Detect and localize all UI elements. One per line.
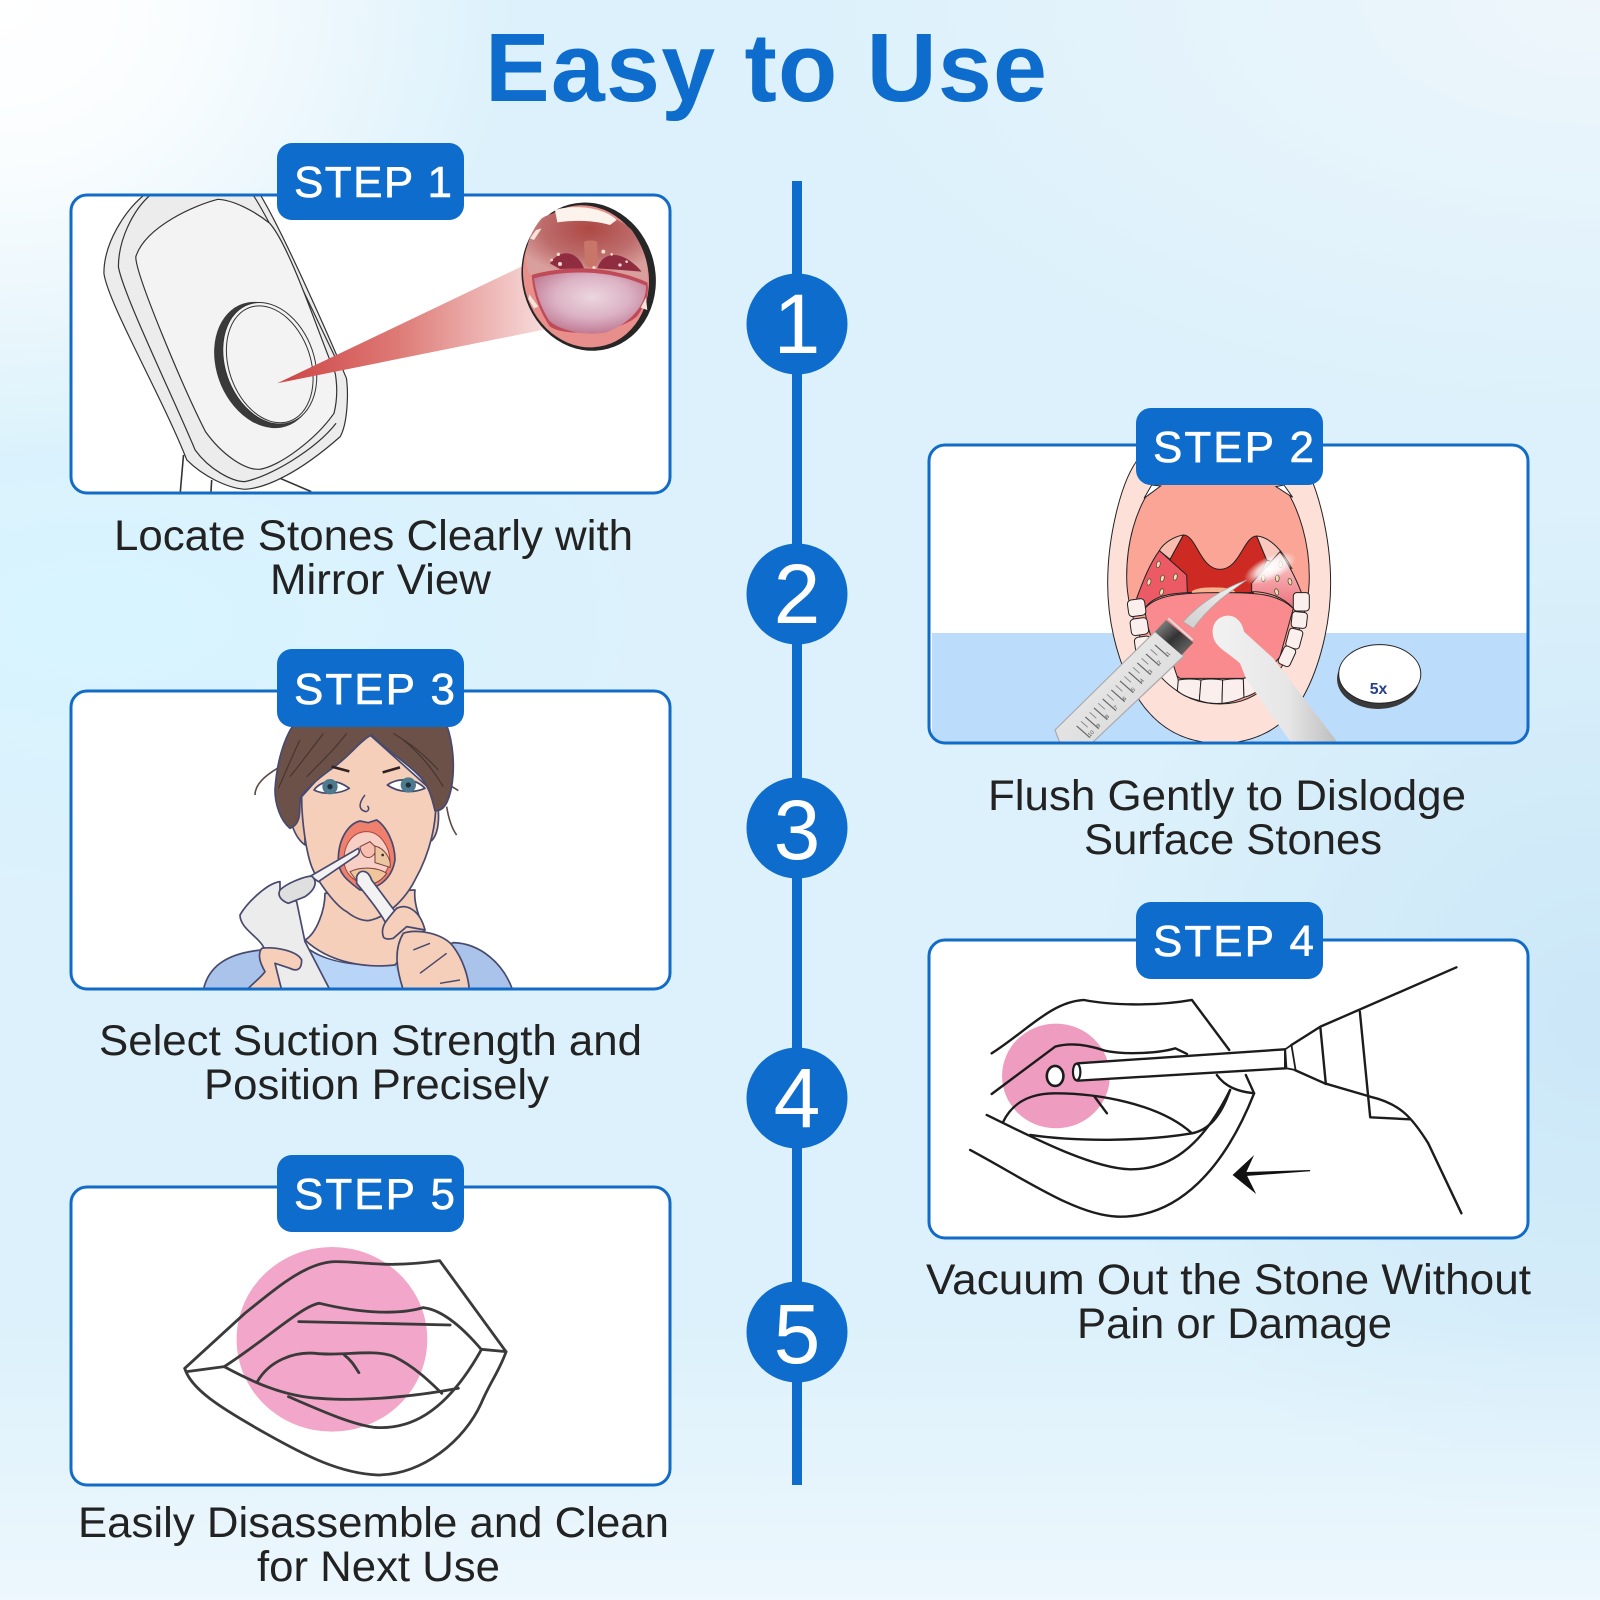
card border [71,1187,670,1485]
panel: step 3 [71,649,670,1109]
caption: step 2: Surface Stones [1084,816,1382,864]
caption: step 1: Mirror View [270,556,492,604]
left hand [247,948,302,990]
number 2 [746,544,848,644]
syringe scale numbers [1087,651,1172,738]
card [71,691,670,989]
badge: step 1: STEP 1 [294,158,452,207]
teeth [1127,593,1309,703]
caption: step 1 [114,512,633,604]
card [929,940,1528,1238]
card border [71,195,670,493]
caption: step 4: Vacuum Out the Stone Without [926,1256,1531,1304]
illustration: open lips with highlight [185,1247,506,1475]
badge: step 1 [277,143,464,220]
syringe scale numbers: 5 [1130,687,1137,693]
number 5: 5 [774,1287,820,1381]
throat [1170,535,1267,593]
red beam [277,265,545,383]
caption: step 4 [926,1256,1531,1348]
palate [526,210,648,282]
mouth [338,820,395,890]
number 2: 2 [774,547,820,641]
number 4 [746,1048,848,1148]
hair [275,725,453,828]
syringe [1055,580,1247,743]
caption: step 1: Locate Stones Clearly with [114,512,633,560]
device handle [1291,967,1461,1213]
number 3 [746,778,848,878]
nose [360,795,369,812]
illustration: open mouth, syringe flushing tonsils [932,457,1528,743]
lips [185,1261,506,1475]
mouth cavity [1127,479,1309,704]
magnified mouth mirror [521,202,656,351]
badge: step 4: STEP 4 [1153,917,1314,966]
blue floor [932,633,1528,743]
panel: step 1 [71,143,672,604]
caption: step 5: for Next Use [257,1543,500,1591]
illustration: mirror stand with magnified mouth view [104,187,672,493]
number 3: 3 [774,783,820,877]
card [929,445,1528,743]
syringe scale numbers: 9 [1096,723,1102,729]
title: Easy to Use [485,13,1047,122]
corner upper teeth [1144,485,1293,498]
number 1 [746,274,848,374]
syringe scale numbers: 7 [1113,705,1120,711]
card [71,195,670,493]
throat [550,253,642,272]
eyes [314,777,425,794]
syringe scale numbers: 10 [1087,730,1096,738]
suction tube [1073,1045,1296,1081]
spray [1244,552,1295,584]
stand legs [180,455,311,493]
panel: step 5 [71,1155,670,1591]
caption: step 3 [99,1017,642,1109]
badge: step 5: STEP 5 [294,1170,455,1219]
badge: step 4 [1136,902,1323,979]
5x mirror: 5x [1370,681,1388,698]
shirt [203,943,513,990]
card border [929,940,1528,1238]
tonsil stones [1146,561,1293,596]
small round mirror [214,302,318,428]
caption: step 4: Pain or Damage [1077,1300,1392,1348]
neck and chest [305,890,425,966]
syringe scale numbers: 1 [1165,651,1172,657]
teal hair clip behind card [264,697,282,712]
illustration: vacuuming the stone from tonsil [970,967,1461,1217]
uvula base [1192,587,1235,593]
card border [71,691,670,989]
number 4: 4 [774,1051,820,1145]
illustration: woman using suction device [203,725,513,990]
mirror face [136,199,337,469]
white stick [1213,616,1338,743]
arrow [1233,1155,1310,1194]
caption: step 5: Easily Disassemble and Clean [78,1499,669,1547]
syringe scale numbers: 6 [1122,696,1128,702]
number 5 [746,1282,848,1382]
inner stick and upper fingers [357,871,425,939]
pink highlight [237,1247,427,1432]
caption: step 3: Position Precisely [204,1061,549,1109]
caption: step 2: Flush Gently to Dislodge [988,772,1466,820]
timeline: central line with numbered circles [746,181,848,1485]
pink highlight [1002,1024,1110,1128]
tonsil stones [550,250,628,269]
left tonsil [1137,551,1187,608]
card [71,1187,670,1485]
badge: step 2: STEP 2 [1153,423,1314,472]
caption: step 2 [988,772,1466,864]
badge: step 3: STEP 3 [294,665,455,714]
card border [929,445,1528,743]
face [302,735,436,921]
ears [292,802,306,846]
badge: step 2 [1136,408,1323,485]
syringe scale numbers: 2 [1156,660,1163,666]
side tooth highlights [528,294,647,310]
syringe scale numbers: 8 [1104,714,1111,720]
panel: step 4 [926,902,1531,1348]
caption: step 5 [78,1499,669,1591]
outer lips [1108,457,1331,743]
right tonsil [1252,552,1302,608]
number 1: 1 [774,277,820,371]
syringe scale numbers: 3 [1148,669,1154,675]
stone [1047,1066,1063,1086]
lips [970,1000,1254,1217]
panel: step 2 [929,408,1528,864]
tongue [1145,593,1293,678]
badge: step 3 [277,649,464,727]
lower lip edge and tongue [532,268,648,333]
stray hair [255,768,458,835]
badge: step 5 [277,1155,464,1232]
syringe scale numbers: 4 [1139,678,1146,684]
device [240,848,359,990]
upper teeth [555,207,617,225]
main right hand [397,931,469,990]
caption: step 3: Select Suction Strength and [99,1017,642,1065]
eyebrows [332,767,400,772]
mirror body [104,193,347,489]
